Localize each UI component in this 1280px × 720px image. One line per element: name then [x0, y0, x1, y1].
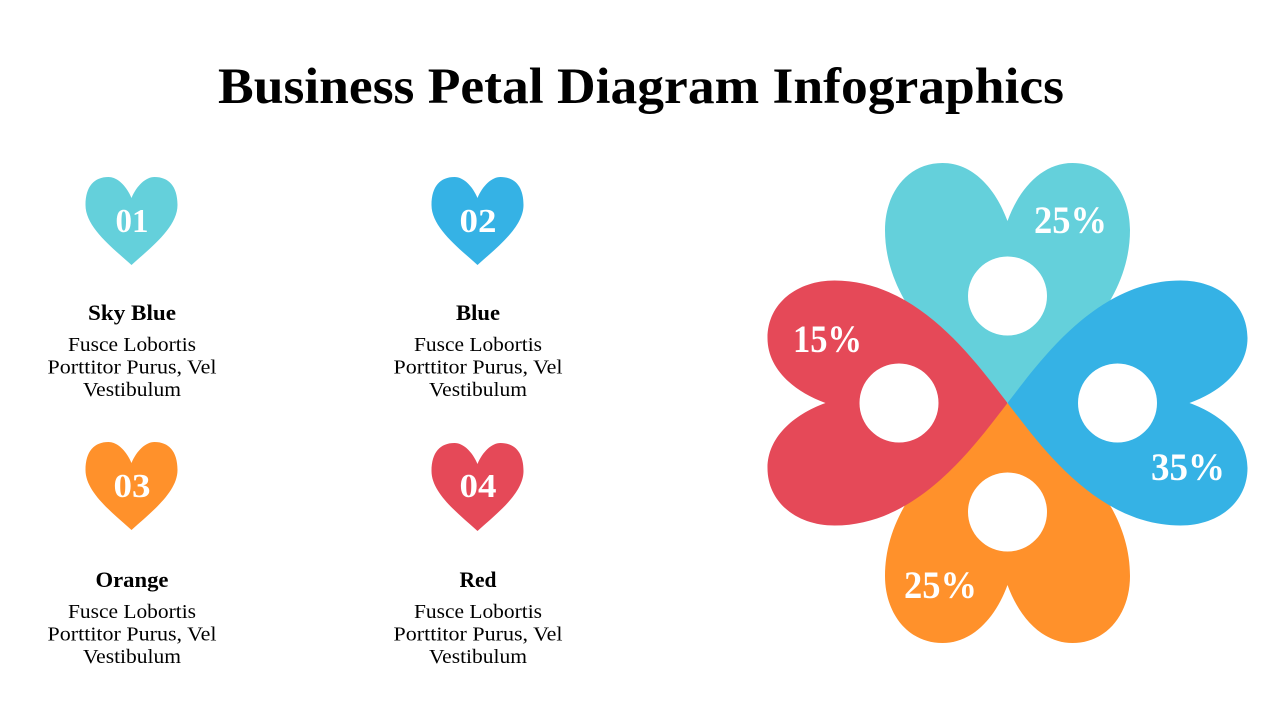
description: sky blue: Porttitor Purus, Vel: [48, 356, 217, 378]
petal: sky blue: [885, 163, 1130, 403]
description: red: Porttitor Purus, Vel: [394, 624, 563, 646]
description: blue: Fusce Lobortis: [414, 334, 542, 356]
hole: orange petal: [968, 472, 1047, 552]
hole: blue petal: [1078, 364, 1157, 442]
icon: red heart: [432, 443, 524, 531]
description: red: Vestibulum: [429, 646, 527, 668]
number 04: 04: [460, 468, 496, 505]
description: sky blue: Fusce Lobortis: [68, 334, 196, 356]
value: red 15%: 15%: [793, 318, 862, 361]
heading: Blue: Blue: [456, 300, 500, 325]
description: sky blue: [48, 334, 217, 401]
description: orange: Vestibulum: [83, 646, 181, 668]
description: red: Fusce Lobortis: [414, 601, 542, 623]
petal diagram: [768, 163, 1248, 643]
number 01: 01: [116, 203, 148, 240]
title: Business Petal Diagram Infographics: [218, 59, 1064, 115]
description: orange: Porttitor Purus, Vel: [48, 624, 217, 646]
item 03: orange: [48, 442, 217, 668]
icon: blue heart: [432, 177, 524, 265]
description: orange: [48, 601, 217, 668]
icon: sky blue heart: [86, 177, 178, 265]
number 02: 02: [460, 203, 496, 240]
heading: Sky Blue: Sky Blue: [88, 300, 176, 325]
item 02: blue: [394, 177, 563, 401]
description: blue: Vestibulum: [429, 379, 527, 401]
description: red: [394, 601, 563, 668]
description: orange: Fusce Lobortis: [68, 601, 196, 623]
heading: Red: Red: [460, 567, 496, 592]
petal: orange: [885, 403, 1130, 643]
value: orange 25%: 25%: [904, 564, 977, 607]
item 01: sky blue: [48, 177, 217, 401]
hole: red petal: [860, 364, 938, 442]
value: blue 35%: 35%: [1151, 446, 1225, 489]
number 03: 03: [114, 468, 150, 505]
description: blue: Porttitor Purus, Vel: [394, 356, 563, 378]
petal: blue: [1008, 280, 1248, 526]
description: blue: [394, 334, 563, 401]
item 04: red: [394, 443, 563, 668]
hole: sky blue petal: [968, 256, 1047, 336]
value: sky blue 25%: 25%: [1034, 199, 1107, 242]
description: sky blue: Vestibulum: [83, 379, 181, 401]
petal: red: [768, 280, 1008, 526]
icon: orange heart: [86, 442, 178, 530]
heading: Orange: Orange: [96, 567, 169, 592]
